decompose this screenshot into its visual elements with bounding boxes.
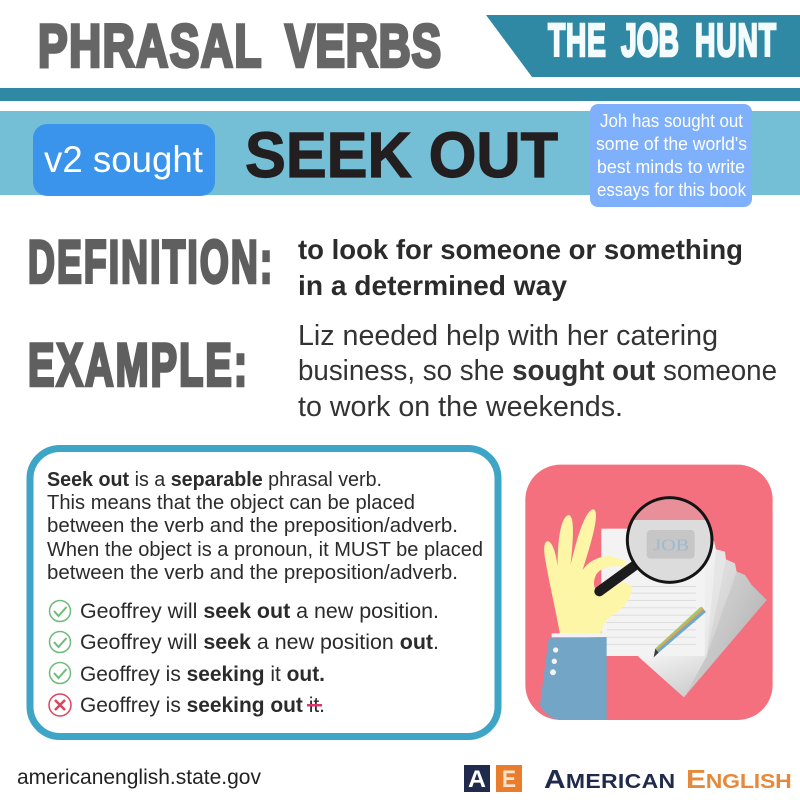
icon: check xyxy=(50,632,70,652)
heading band xyxy=(0,111,800,195)
definition text: in a determined way xyxy=(298,270,568,301)
document lines xyxy=(607,586,696,645)
panel: separable explanation xyxy=(30,448,498,736)
logo: american english: ENGLISH xyxy=(686,765,792,794)
badge: v2 sought xyxy=(33,124,215,196)
explanation text: When the object is a pronoun, it MUST be placed xyxy=(47,538,483,561)
sleeve xyxy=(540,637,607,720)
magnifier lens: JOB xyxy=(653,536,689,555)
cuff xyxy=(552,633,607,637)
example sentence 2: Geoffrey will seek a new position out. xyxy=(80,631,439,654)
definition text: to look for someone or something xyxy=(298,234,743,265)
callout: sample sentence: some of the world's xyxy=(596,133,747,154)
magnifier lens xyxy=(627,496,712,582)
magnifier handle xyxy=(599,566,634,591)
footer url: americanenglish.state.gov xyxy=(17,766,261,789)
strikethrough xyxy=(307,704,322,706)
logo: american english xyxy=(464,765,792,794)
ribbon: the job hunt: THE xyxy=(548,15,606,67)
title xyxy=(38,13,441,80)
explanation text xyxy=(47,468,483,584)
sleeve buttons xyxy=(550,647,558,675)
ribbon: the job hunt: HUNT xyxy=(695,15,776,67)
logo: american english: A xyxy=(468,766,486,793)
example text: to work on the weekends. xyxy=(298,391,623,423)
ribbon: the job hunt: JOB xyxy=(621,15,679,67)
title: VERBS xyxy=(285,13,441,80)
callout: sample sentence: best minds to write xyxy=(597,156,745,177)
example label: EXAMPLE: xyxy=(28,331,247,398)
pencil xyxy=(654,607,706,657)
icon: cross xyxy=(49,694,71,716)
example text xyxy=(298,320,777,423)
title: PHRASAL xyxy=(38,13,261,80)
callout: sample sentence xyxy=(590,104,752,207)
example text: Liz needed help with her catering xyxy=(298,320,718,352)
fanned papers xyxy=(638,540,767,697)
illustration: job search xyxy=(525,465,773,720)
icon: check xyxy=(50,662,70,684)
badge: v2 sought: v2 sought xyxy=(44,139,204,180)
phrasal verb heading: SEEK OUT xyxy=(245,119,558,191)
explanation text: This means that the object can be placed xyxy=(47,491,415,514)
callout: sample sentence: Joh has sought out xyxy=(600,110,743,131)
definition label: DEFINITION: xyxy=(28,228,272,296)
explanation text: between the verb and the preposition/adverb. xyxy=(47,561,458,584)
background tile xyxy=(525,465,773,720)
example sentence 3: Geoffrey is seeking it out. xyxy=(80,663,325,686)
definition text xyxy=(298,234,743,301)
explanation text: between the verb and the preposition/adverb. xyxy=(47,514,458,537)
example sentence 4: Geoffrey is seeking out it. xyxy=(80,694,325,717)
explanation text: Seek out is a separable phrasal verb. xyxy=(47,468,382,491)
icon: check xyxy=(50,600,70,622)
hand xyxy=(544,509,632,634)
divider bar xyxy=(0,88,800,101)
logo: american english: AMERICAN xyxy=(544,765,675,794)
callout: sample sentence: essays for this book xyxy=(597,179,747,200)
ribbon: the job hunt xyxy=(486,15,800,77)
example sentence 1: Geoffrey will seek out a new position. xyxy=(80,600,439,623)
example text: business, so she sought out someone xyxy=(298,355,777,387)
document xyxy=(601,529,705,656)
logo: american english: E xyxy=(502,766,516,793)
